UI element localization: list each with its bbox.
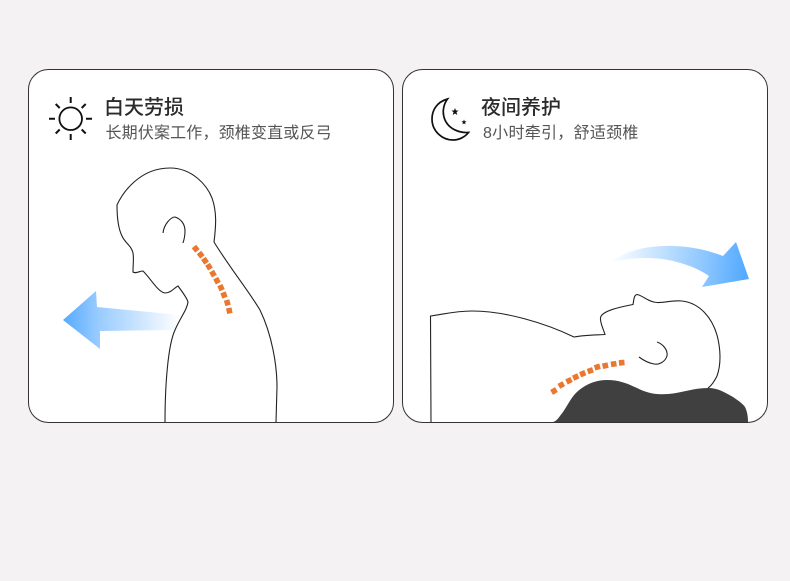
arrow: upward curved traction [610, 242, 749, 287]
panel background [402, 70, 768, 422]
figure: bent neck [117, 168, 277, 422]
pillow [553, 380, 748, 422]
spine: curved neck dots [192, 245, 233, 314]
subheading: nighttime: 8小时牵引，舒适颈椎 [483, 124, 639, 142]
spine: supported neck dots [550, 360, 625, 395]
panel: nighttime care [402, 70, 768, 422]
ear [639, 342, 667, 364]
heading: nighttime: 夜间养护 [481, 96, 561, 119]
heading: daytime: 白天劳损 [104, 96, 184, 119]
figure: reclining head and shoulders [430, 294, 720, 422]
panel: daytime strain [28, 70, 394, 422]
panel background [28, 70, 394, 422]
arrow: forward strain [63, 291, 180, 349]
ear [163, 217, 185, 243]
subheading: daytime: 长期伏案工作，颈椎变直或反弓 [106, 124, 332, 142]
icon: sun [49, 97, 92, 140]
icon: moon and stars [432, 99, 468, 140]
